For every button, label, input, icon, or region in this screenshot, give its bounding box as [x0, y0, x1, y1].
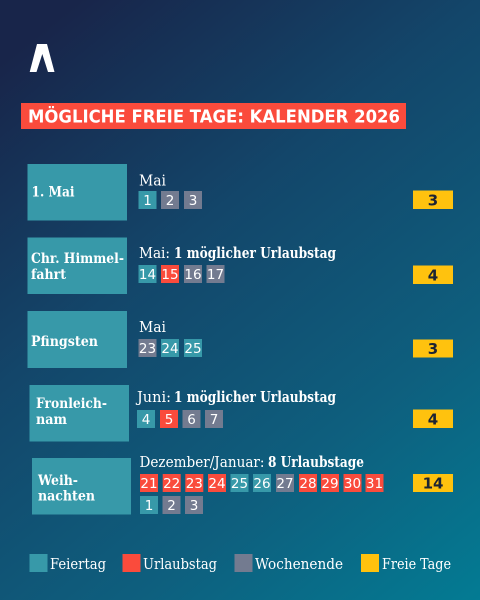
legend: Urlaubstag — [122, 554, 217, 573]
day chips: 25 — [231, 476, 248, 492]
day chips: 16 — [184, 267, 202, 283]
legend: Wochenende: Wochenende — [255, 555, 343, 573]
day chips: 3 — [190, 498, 198, 514]
day chips: 4 — [142, 412, 150, 428]
day chips: 31 — [366, 476, 383, 492]
day chips: 7 — [210, 412, 218, 428]
day chips — [138, 191, 202, 209]
day chips: 23 — [186, 476, 203, 492]
day chips: 1 — [143, 193, 152, 209]
legend: Freie Tage: Freie Tage — [382, 555, 451, 573]
month heading: Dezember/Januar: — [140, 453, 264, 471]
month heading: Mai: — [139, 244, 170, 262]
holiday label: Fronleichnam — [30, 385, 129, 442]
day chips: 2 — [167, 498, 176, 514]
day chips: 5 — [165, 412, 173, 428]
day chips: 6 — [187, 412, 196, 428]
day chips: 21 — [140, 476, 158, 492]
holiday label: Chr. Himmelfahrt: fahrt — [31, 267, 66, 283]
holiday label: Fronleichnam: nam — [36, 412, 67, 428]
panel: 1. Mai — [28, 164, 453, 220]
free days total — [413, 474, 453, 492]
month heading: Juni: — [135, 388, 171, 406]
day chips: 1 — [145, 498, 153, 514]
legend: Urlaubstag: Urlaubstag — [143, 555, 217, 573]
free days total — [413, 266, 453, 284]
holiday label: Weihnachten: Weih- — [37, 473, 78, 489]
day chips: 26 — [253, 476, 271, 492]
legend — [30, 554, 451, 573]
free days total: 3 — [428, 192, 438, 210]
month heading: 1 möglicher Urlaubstag — [174, 244, 336, 262]
free days total — [413, 410, 453, 428]
day chips: 24 — [161, 341, 179, 357]
free days total: 4 — [428, 410, 438, 428]
panel: Fronleichnam — [30, 385, 453, 442]
holiday label: Pfingsten — [28, 311, 127, 368]
panel: Pfingsten — [28, 311, 453, 368]
holiday label: 1. Mai: 1. Mai — [32, 184, 74, 200]
day chips: 23 — [139, 341, 156, 357]
month heading: Mai — [139, 172, 166, 190]
title: MÖGLICHE FREIE TAGE: KALENDER 2026 — [28, 106, 400, 128]
free days total — [413, 340, 453, 358]
day chips: 17 — [207, 267, 224, 283]
holiday label: Fronleichnam: Fronleich- — [36, 396, 107, 412]
day chips — [138, 265, 224, 283]
day chips: 30 — [344, 476, 361, 492]
month heading: Mai — [139, 318, 166, 336]
day chips — [140, 474, 384, 514]
day chips — [137, 410, 223, 428]
month heading: 8 Urlaubstage — [268, 453, 364, 471]
holiday label: Weihnachten — [32, 458, 131, 514]
day chips: 24 — [208, 476, 226, 492]
holiday label: 1. Mai — [28, 164, 127, 220]
holiday label: Weihnachten: nachten — [38, 488, 95, 504]
month heading — [139, 244, 336, 262]
panel: Weihnachten — [32, 453, 453, 514]
day chips: 3 — [189, 193, 197, 209]
legend: Feiertag — [30, 554, 106, 573]
day chips: 29 — [321, 476, 339, 492]
month heading: 1 möglicher Urlaubstag — [174, 388, 336, 406]
day chips: 22 — [163, 476, 180, 492]
day chips — [138, 339, 202, 357]
holiday label: Chr. Himmelfahrt — [28, 238, 127, 294]
icon: logo — [30, 44, 54, 72]
day chips: 28 — [299, 476, 317, 492]
holiday label: Pfingsten: Pfingsten — [31, 334, 98, 350]
legend: Freie Tage — [361, 554, 451, 573]
holiday label: Chr. Himmelfahrt: Chr. Himmel- — [31, 251, 124, 267]
free days total: 14 — [423, 474, 443, 492]
free days total — [413, 190, 453, 210]
month heading — [135, 388, 336, 406]
panel: Christi Himmelfahrt — [28, 238, 453, 294]
day chips: 14 — [139, 267, 156, 283]
day chips: 15 — [161, 267, 179, 283]
free days total: 4 — [428, 266, 438, 284]
free days total: 3 — [428, 340, 438, 358]
day chips: 27 — [276, 476, 294, 492]
month heading — [140, 453, 364, 471]
day chips: 2 — [166, 193, 174, 209]
day chips: 25 — [184, 341, 202, 357]
legend: Feiertag: Feiertag — [50, 555, 106, 573]
